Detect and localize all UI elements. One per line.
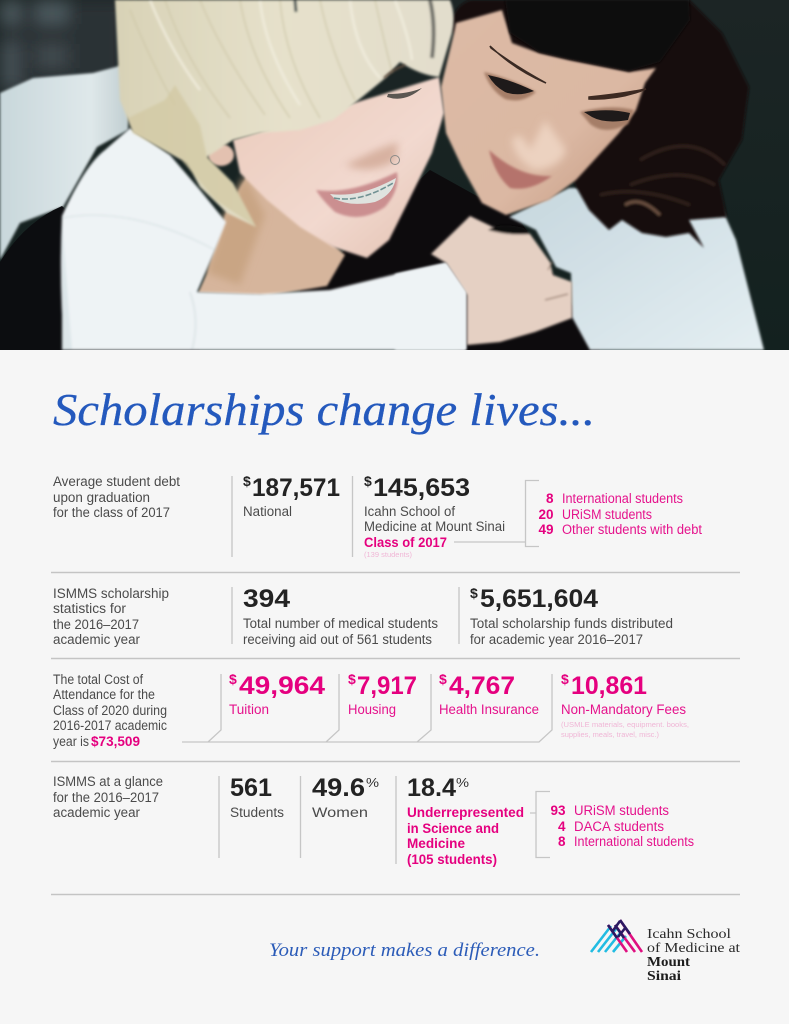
facial details: dark-haired student [484, 46, 646, 189]
section: average student debt [53, 473, 702, 559]
section label: student debt [53, 474, 180, 520]
section label: cost of attendance: Attendance for the [53, 687, 155, 702]
stat: women [312, 774, 379, 820]
stat: scholarship funds: $ [470, 585, 478, 601]
stat: health insurance: Health Insurance [439, 702, 539, 717]
section label: student debt: for the class of 2017 [53, 505, 170, 520]
facial details: blonde student [316, 65, 422, 217]
tagline: Your support makes a difference. [269, 940, 540, 961]
breakdown: underrepresented students: 4 [558, 819, 566, 834]
breakdown: underrepresented students [550, 803, 694, 849]
stat: housing: 7,917 [357, 672, 417, 700]
stat: health insurance: $ [439, 671, 447, 687]
stat: underrepresented in science and medicine: in Science and [407, 821, 499, 836]
stat: students receiving aid: Total number of medical students [243, 616, 438, 631]
ear [208, 144, 234, 166]
logo wordmark: Mount [647, 955, 690, 970]
section: scholarship statistics [53, 585, 673, 647]
stat: non-mandatory fees: 10,861 [571, 672, 647, 700]
stat: underrepresented in science and medicine: (105 students) [407, 852, 497, 867]
hand on shoulder [431, 216, 572, 345]
section label: scholarship statistics: statistics for [53, 601, 127, 616]
neck [198, 170, 345, 296]
breakdown: students with debt: 49 [538, 522, 554, 537]
section label: scholarship statistics: the 2016–2017 [53, 617, 139, 632]
stat: ISMMS debt [364, 473, 505, 559]
breakdown: students with debt: 8 [546, 491, 554, 506]
stat: non-mandatory fees: supplies, meals, travel, misc.) [561, 730, 659, 739]
section label: cost of attendance: $73,509 [91, 734, 140, 749]
section label: student debt: Average student debt [53, 474, 180, 489]
section: cost of attendance [53, 671, 689, 749]
stat: underrepresented in science and medicine: Medicine [407, 836, 465, 851]
stat: ISMMS debt: Medicine at Mount Sinai [364, 519, 505, 534]
stat: ISMMS debt: Class of 2017 [364, 535, 447, 550]
stat: tuition: $ [229, 671, 237, 687]
stat: health insurance: 4,767 [449, 672, 515, 700]
bracket connector [454, 480, 539, 546]
stat: students: Students [230, 805, 284, 820]
face: dark-haired student [441, 10, 656, 215]
dark torso middle [300, 170, 600, 350]
breakdown: students with debt: 20 [538, 507, 554, 522]
stat: housing: $ [348, 671, 356, 687]
stat: women: 49.6 [312, 774, 365, 802]
breakdown: students with debt: Other students with debt [562, 522, 702, 537]
stat: students receiving aid: receiving aid out of 561 students [243, 632, 432, 647]
stat: students [230, 774, 284, 820]
white shirt right [509, 180, 764, 350]
breakdown: underrepresented students: URiSM students [574, 803, 669, 818]
logo wordmark: Icahn School [647, 927, 731, 942]
breakdown: students with debt: International students [562, 491, 683, 506]
connector lines [182, 674, 552, 742]
stat: tuition: Tuition [229, 702, 269, 717]
stat: scholarship funds: for academic year 2016–2017 [470, 632, 643, 647]
stat: housing: Housing [348, 702, 396, 717]
stat: ISMMS debt: (139 students) [364, 550, 412, 559]
stat: ISMMS debt: $ [364, 473, 372, 489]
photo: two students embracing [0, 0, 789, 350]
stat: scholarship funds [470, 585, 673, 647]
section label: at a glance [53, 774, 163, 820]
logo wordmark [647, 927, 740, 984]
stat: women: Women [312, 805, 368, 820]
back shirt left [0, 65, 130, 260]
face: blonde student [233, 77, 444, 258]
title: Scholarships change lives... [53, 385, 595, 435]
white sleeve [61, 128, 466, 350]
section label: at a glance: ISMMS at a glance [53, 774, 163, 789]
stat: non-mandatory fees: Non-Mandatory Fees [561, 702, 686, 717]
section label: scholarship statistics: academic year [53, 632, 140, 647]
stat: non-mandatory fees: (USMLE materials, equipment. books, [561, 720, 689, 729]
breakdown: students with debt: URiSM students [562, 507, 652, 522]
stat: tuition: 49,964 [239, 672, 325, 700]
stat: non-mandatory fees [561, 671, 689, 739]
breakdown: underrepresented students: 8 [558, 834, 566, 849]
section label: student debt: upon graduation [53, 490, 150, 505]
breakdown: underrepresented students: International students [574, 834, 694, 849]
dark top left [0, 206, 200, 350]
breakdown: students with debt [538, 491, 702, 537]
stat: students: 561 [230, 774, 272, 802]
section label: cost of attendance: Class of 2020 during [53, 703, 167, 718]
section label: scholarship statistics: ISMMS scholarship [53, 586, 169, 601]
stat: housing [348, 671, 417, 717]
section label: cost of attendance: 2016-2017 academic [53, 718, 167, 733]
icon: mountain stripes [591, 920, 642, 952]
logo wordmark: of Medicine at [647, 941, 740, 956]
stat: underrepresented in science and medicine [407, 774, 524, 867]
stat: national debt [243, 473, 340, 519]
stat: non-mandatory fees: $ [561, 671, 569, 687]
section label: at a glance: academic year [53, 805, 140, 820]
stat: ISMMS debt: 145,653 [373, 474, 470, 502]
stat: scholarship funds: Total scholarship funds distributed [470, 616, 673, 631]
stat: women: % [366, 775, 379, 790]
stat: national debt: $ [243, 473, 251, 489]
stat: ISMMS debt: Icahn School of [364, 504, 455, 519]
section label: cost of attendance: year is [53, 734, 89, 749]
stat: tuition [229, 671, 325, 717]
section label: cost of attendance [53, 672, 167, 749]
section label: at a glance: for the 2016–2017 [53, 790, 159, 805]
stat: students receiving aid: 394 [243, 585, 290, 613]
section: ISMMS at a glance [53, 774, 694, 867]
stat: national debt: 187,571 [252, 474, 340, 502]
blonde hair [115, 0, 454, 227]
dark-haired fringe [505, 0, 690, 71]
stat: underrepresented in science and medicine: 18.4 [407, 774, 456, 802]
stat: students receiving aid [243, 585, 438, 647]
breakdown: underrepresented students: 93 [550, 803, 566, 818]
stat: health insurance [439, 671, 539, 717]
stat: underrepresented in science and medicine: % [456, 775, 469, 790]
sleeve end [395, 263, 466, 350]
stat: underrepresented in science and medicine: Underrepresented [407, 805, 524, 820]
breakdown: underrepresented students: DACA students [574, 819, 664, 834]
logo: Icahn School of Medicine at Mount Sinai [591, 920, 740, 984]
stat: scholarship funds: 5,651,604 [480, 585, 598, 613]
section label: scholarship statistics [53, 586, 169, 647]
logo wordmark: Sinai [647, 969, 681, 984]
bracket connector [530, 792, 550, 858]
section label: cost of attendance: The total Cost of [53, 672, 143, 687]
dark hair [450, 0, 749, 248]
stat: national debt: National [243, 504, 292, 519]
